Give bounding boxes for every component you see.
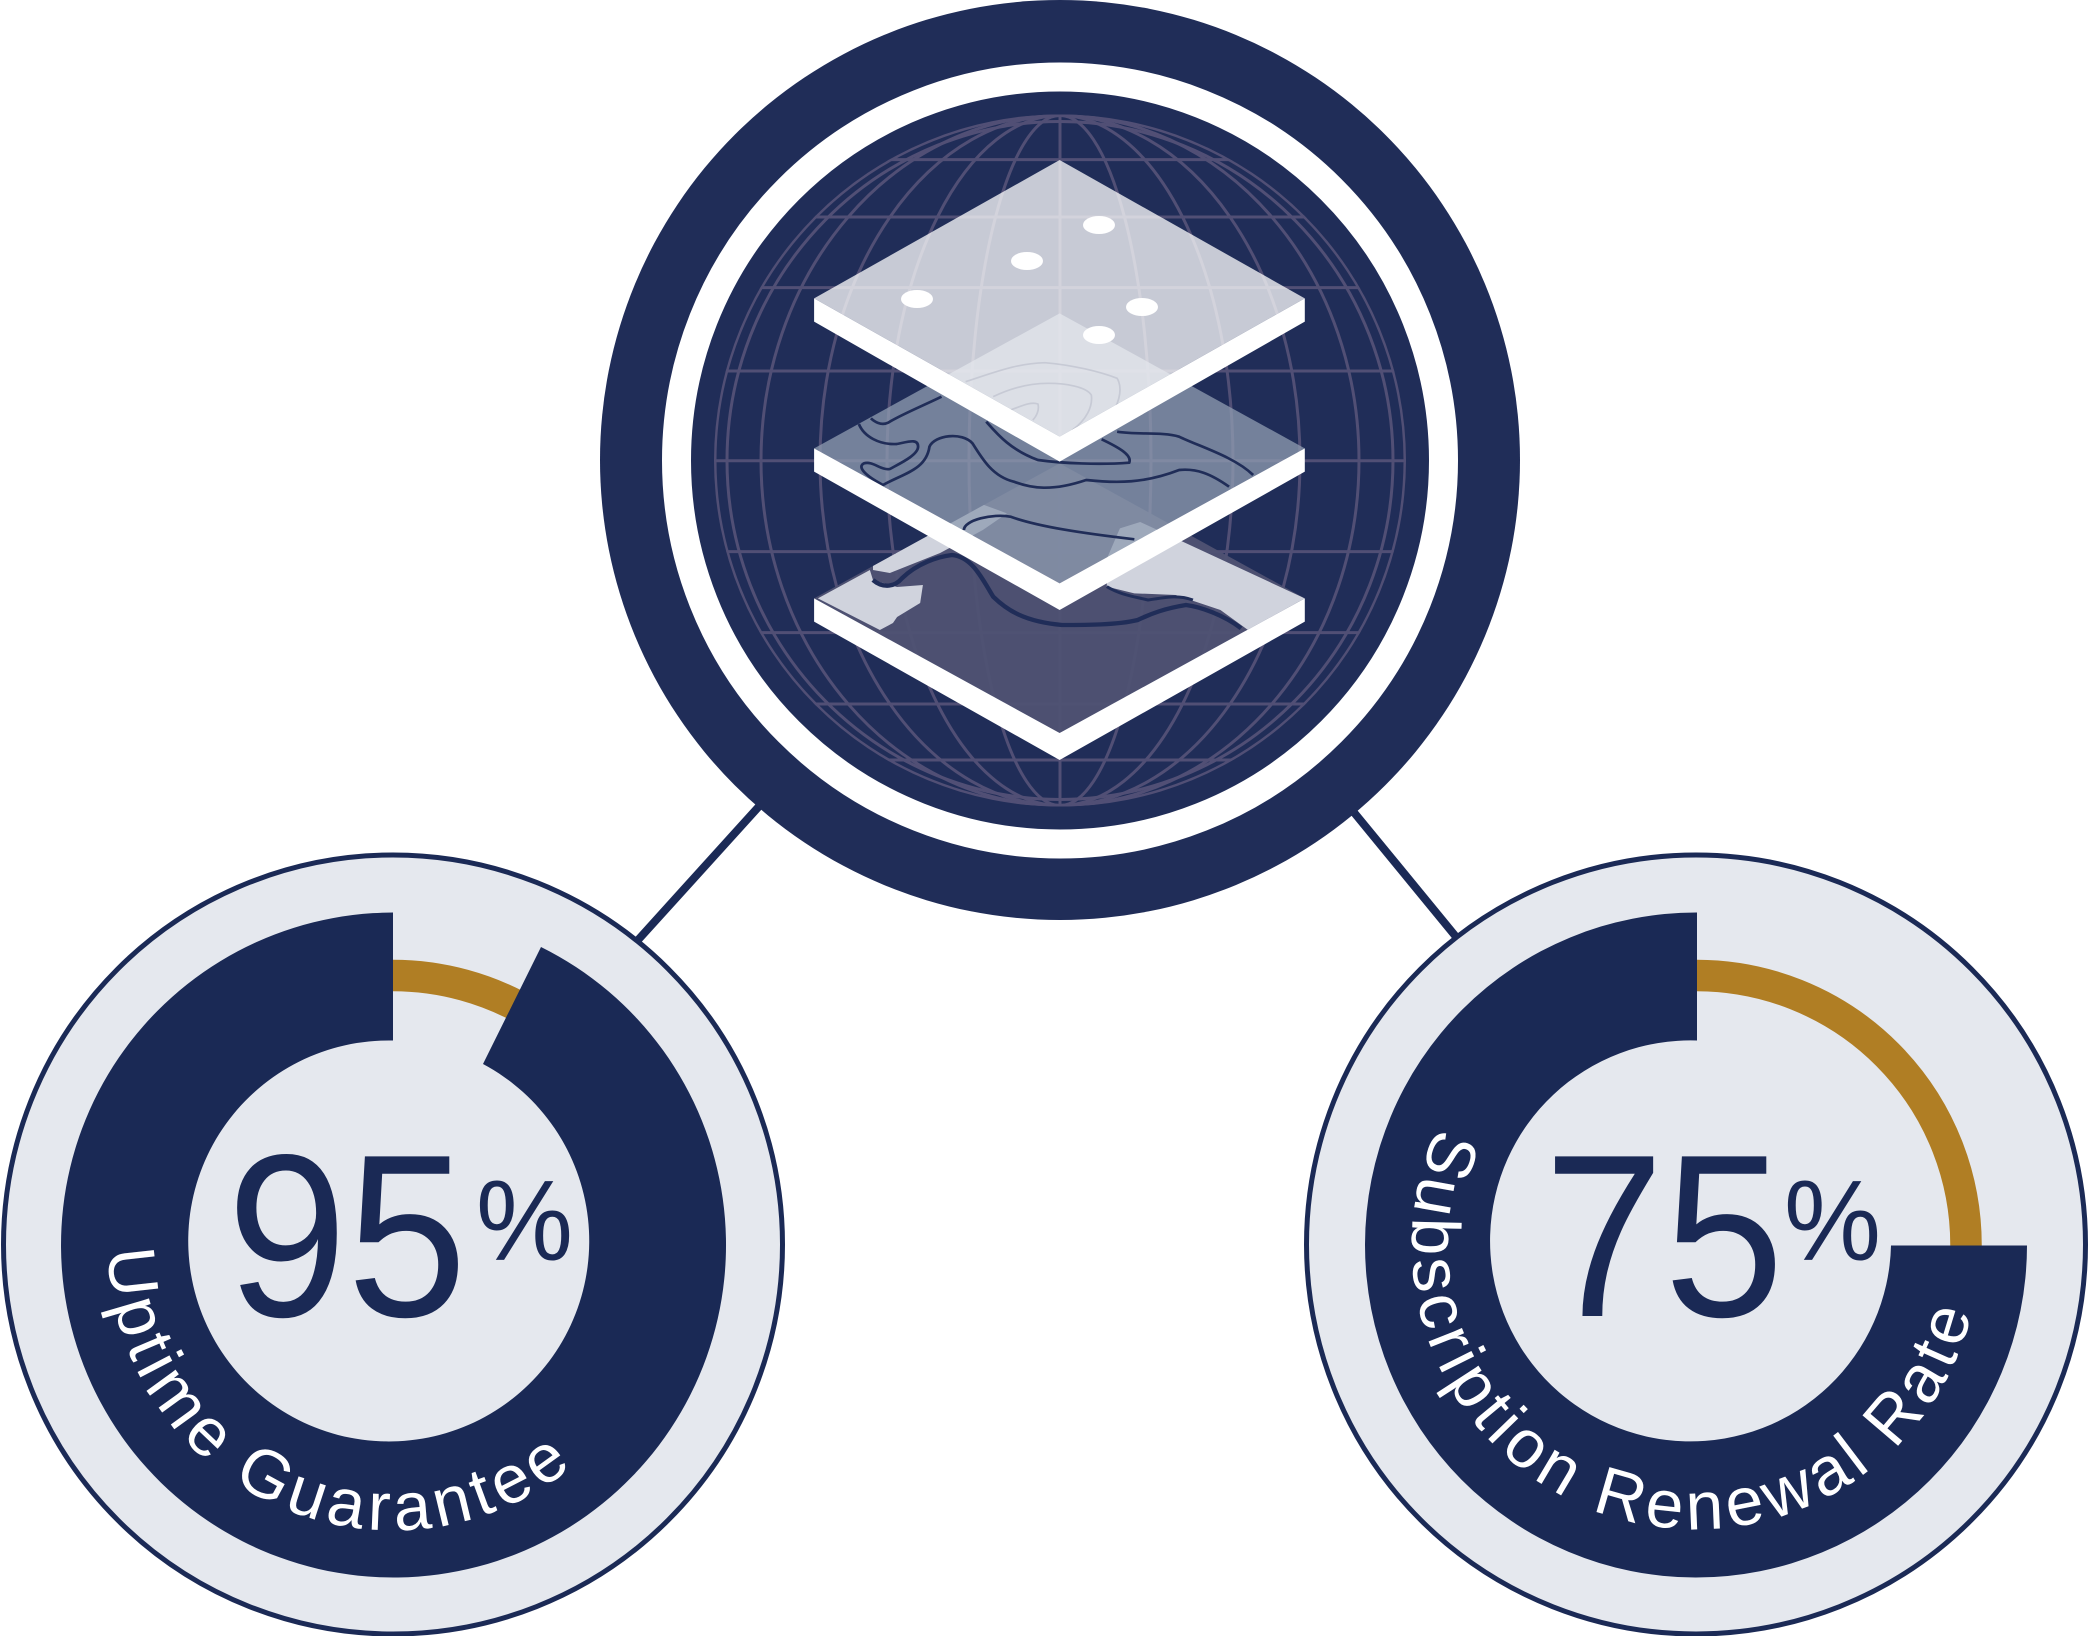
globe grid (700, 110, 1420, 810)
value 75: 75 (1544, 1107, 1784, 1366)
navy ring segment (1365, 912, 2027, 1577)
gold progress arc (393, 976, 530, 1013)
bottom layer edge (814, 598, 1305, 760)
stat panel: uptime guarantee (1, 852, 785, 1636)
emblem outer ring (600, 0, 1520, 920)
top layer: points (814, 160, 1305, 437)
panel disc (4, 855, 782, 1634)
stat panel: subscription renewal rate (1304, 852, 2088, 1636)
percent sign: % (476, 1158, 573, 1285)
bottom layer: terrain (814, 463, 1305, 733)
connector: right (1352, 810, 1457, 938)
panel disc (1306, 855, 2086, 1634)
gold progress arc (1697, 976, 1966, 1246)
middle layer edge (814, 448, 1305, 610)
navy ring segment (61, 912, 726, 1577)
curved label: Uptime Guarantee (101, 1250, 566, 1531)
curved label: Subscription Renewal Rate (1411, 1133, 1968, 1530)
value 95: 95 (227, 1107, 467, 1366)
emblem white ring (676, 77, 1444, 844)
middle layer: contours (814, 313, 1305, 583)
percent sign: % (1784, 1158, 1881, 1285)
central emblem: layered map on globe (600, 0, 1520, 920)
map layers stack (814, 160, 1305, 760)
top layer edge (814, 298, 1305, 462)
connector: left (638, 803, 762, 940)
map points (901, 216, 1158, 344)
